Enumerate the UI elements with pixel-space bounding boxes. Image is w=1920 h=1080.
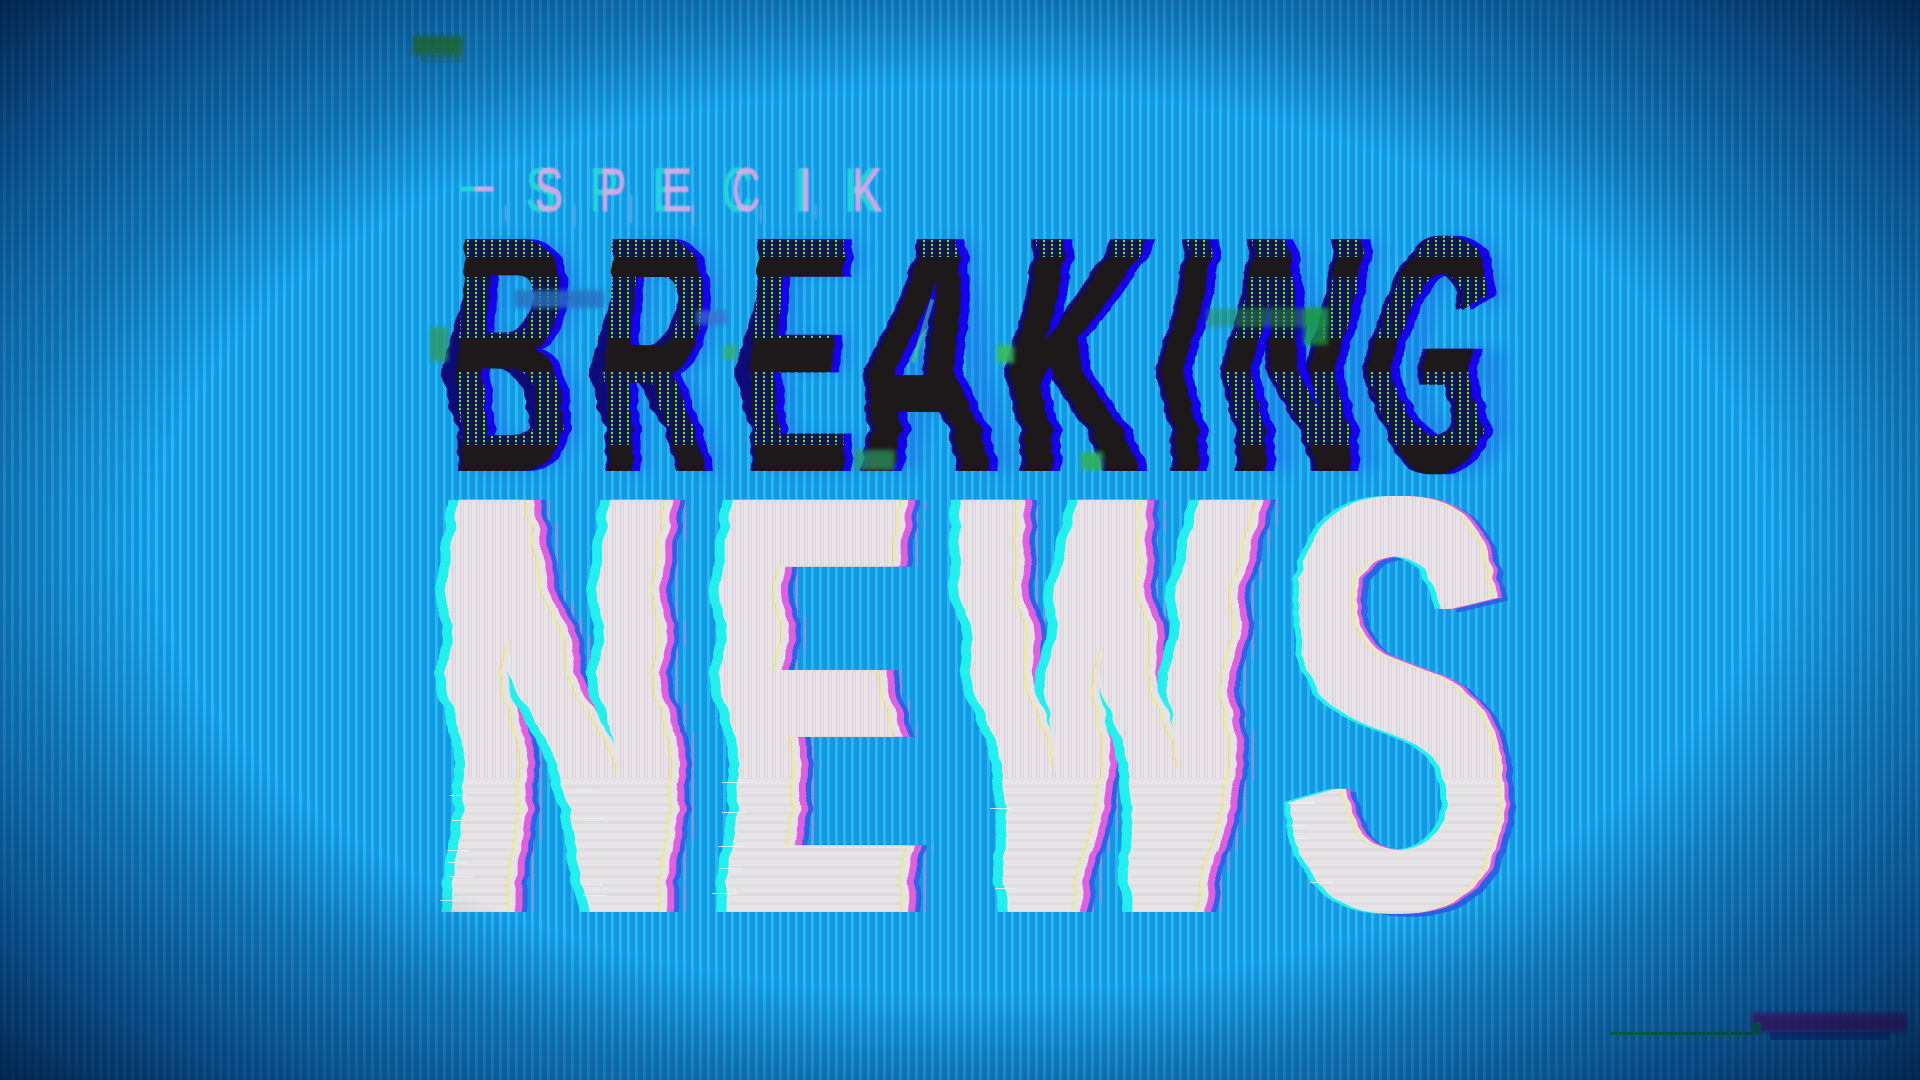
- BREAKING blue channel: [463, 167, 1513, 543]
- NEWS yellow channel: S: [1281, 375, 1511, 1034]
- BREAKING soft blue ghost: R: [622, 167, 730, 543]
- BREAKING black letters: A: [874, 167, 1006, 543]
- NEWS white letters: [442, 370, 1509, 1039]
- BREAKING soft blue ghost: B: [473, 167, 593, 543]
- heading: BREAKING: E: [754, 167, 858, 543]
- BREAKING dark left ghost: B R E: R: [609, 167, 717, 543]
- glitch streaks at the foot of NEWS: [440, 782, 1334, 901]
- NEWS magenta channel: N: [458, 370, 696, 1039]
- BREAKING black letters: R: [604, 167, 712, 543]
- NEWS blue channel: S: [1295, 378, 1525, 1037]
- NEWS magenta channel: S: [1289, 375, 1519, 1034]
- BREAKING dark left ghost: A K I N G: I: [1175, 167, 1215, 543]
- NEWS white letters: N: [442, 370, 680, 1039]
- BREAKING blue channel: B: [463, 167, 583, 543]
- BREAKING soft blue ghost: E: [767, 167, 871, 543]
- subheading magenta channel: E: [662, 156, 692, 224]
- NEWS pale right fringe: E: [728, 370, 919, 1039]
- subheading cyan channel: [461, 156, 876, 224]
- BREAKING blue channel: N: [1251, 167, 1383, 543]
- BREAKING dark left ghost: A K I N G: N: [1237, 167, 1369, 543]
- glitch bar: top left green: [413, 36, 463, 63]
- NEWS pale right fringe: N: [451, 370, 689, 1039]
- NEWS pale right fringe: [451, 370, 1515, 1039]
- BREAKING blue channel: R: [612, 167, 720, 543]
- subheading cyan channel: E: [652, 156, 684, 224]
- BREAKING soft blue ghost: A: [892, 167, 1024, 543]
- NEWS cyan channel: [432, 370, 1503, 1039]
- NEWS cyan channel: E: [709, 370, 900, 1039]
- NEWS lower horizontal noise band: [420, 778, 1540, 920]
- NEWS magenta channel: W: [982, 370, 1268, 1039]
- NEWS vertical line texture: [447, 496, 1496, 778]
- BREAKING green and blue scan stripes: [455, 236, 1488, 445]
- subheading cyan channel: S: [526, 156, 556, 224]
- BREAKING black letters: B: [455, 167, 575, 543]
- subheading cyan channel: I: [794, 156, 808, 224]
- subheading cyan channel: P: [590, 156, 618, 224]
- NEWS white letters: S: [1279, 375, 1509, 1034]
- BREAKING dark left ghost: A K I N G: A: [869, 167, 1001, 543]
- BREAKING dark left ghost: B R E: B: [460, 167, 580, 543]
- NEWS yellow channel: W: [968, 370, 1254, 1039]
- NEWS yellow channel: [444, 370, 1511, 1039]
- subheading cyan channel: C: [722, 156, 752, 224]
- BREAKING black letters: K: [1027, 167, 1153, 543]
- heading: BREAKING: G: [1399, 167, 1513, 543]
- BREAKING soft blue ghost: N: [1260, 167, 1392, 543]
- subheading magenta channel: C: [732, 156, 760, 224]
- NEWS blue channel: N: [463, 370, 701, 1039]
- subheading streaks: [505, 195, 816, 227]
- BREAKING black letters: E: [749, 167, 853, 543]
- NEWS white letters: W: [966, 370, 1252, 1039]
- BREAKING dark left ghost: A K I N G: [869, 167, 1499, 543]
- NEWS white letters: E: [719, 370, 910, 1039]
- heading: BREAKING: [440, 232, 1510, 478]
- BREAKING blue channel: K: [1036, 167, 1162, 543]
- subheading magenta channel: K: [852, 156, 882, 224]
- BREAKING blue channel: I: [1189, 167, 1229, 543]
- BREAKING soft blue ghost: [473, 167, 1522, 543]
- NEWS magenta channel: E: [735, 370, 926, 1039]
- glitch blocks over BREAKING: [430, 290, 1328, 470]
- NEWS blue channel: W: [987, 370, 1273, 1039]
- subheading magenta channel: I: [800, 156, 812, 224]
- heading: BREAKING: G: [1385, 167, 1499, 543]
- G letter gap: [1445, 318, 1520, 337]
- NEWS blue channel: [463, 370, 1525, 1039]
- NEWS blue channel: E: [740, 370, 931, 1039]
- subheading magenta channel: P: [600, 156, 626, 224]
- subheading magenta channel: [476, 156, 882, 224]
- subheading: glitched special label: [461, 156, 882, 227]
- glitch bar: bottom right purple and green: [1610, 1013, 1907, 1040]
- NEWS pale right fringe: S: [1285, 375, 1515, 1034]
- NEWS cyan channel: S: [1273, 375, 1503, 1034]
- BREAKING dark left ghost: A K I N G: K: [1022, 167, 1148, 543]
- heading: BREAKING: G: [1390, 167, 1504, 543]
- subheading magenta channel: S: [535, 156, 563, 224]
- subheading cyan channel: K: [844, 156, 876, 224]
- heading: BREAKING: G: [1408, 167, 1522, 543]
- NEWS pale right fringe: W: [975, 370, 1261, 1039]
- BREAKING black letters: I: [1180, 167, 1220, 543]
- BREAKING blue channel: E: [757, 167, 861, 543]
- BREAKING dark left ghost: B R E: [460, 167, 858, 543]
- NEWS yellow channel: E: [721, 370, 912, 1039]
- NEWS cyan channel: W: [956, 370, 1242, 1039]
- BREAKING blue channel: A: [883, 167, 1015, 543]
- NEWS cyan channel: N: [432, 370, 670, 1039]
- NEWS faint magenta vertical stripes: [524, 500, 1278, 912]
- BREAKING black letters: N: [1242, 167, 1374, 543]
- BREAKING black letters: [455, 167, 1504, 543]
- NEWS yellow channel: N: [444, 370, 682, 1039]
- NEWS magenta channel: [458, 370, 1519, 1039]
- heading: NEWS: [432, 370, 1525, 1039]
